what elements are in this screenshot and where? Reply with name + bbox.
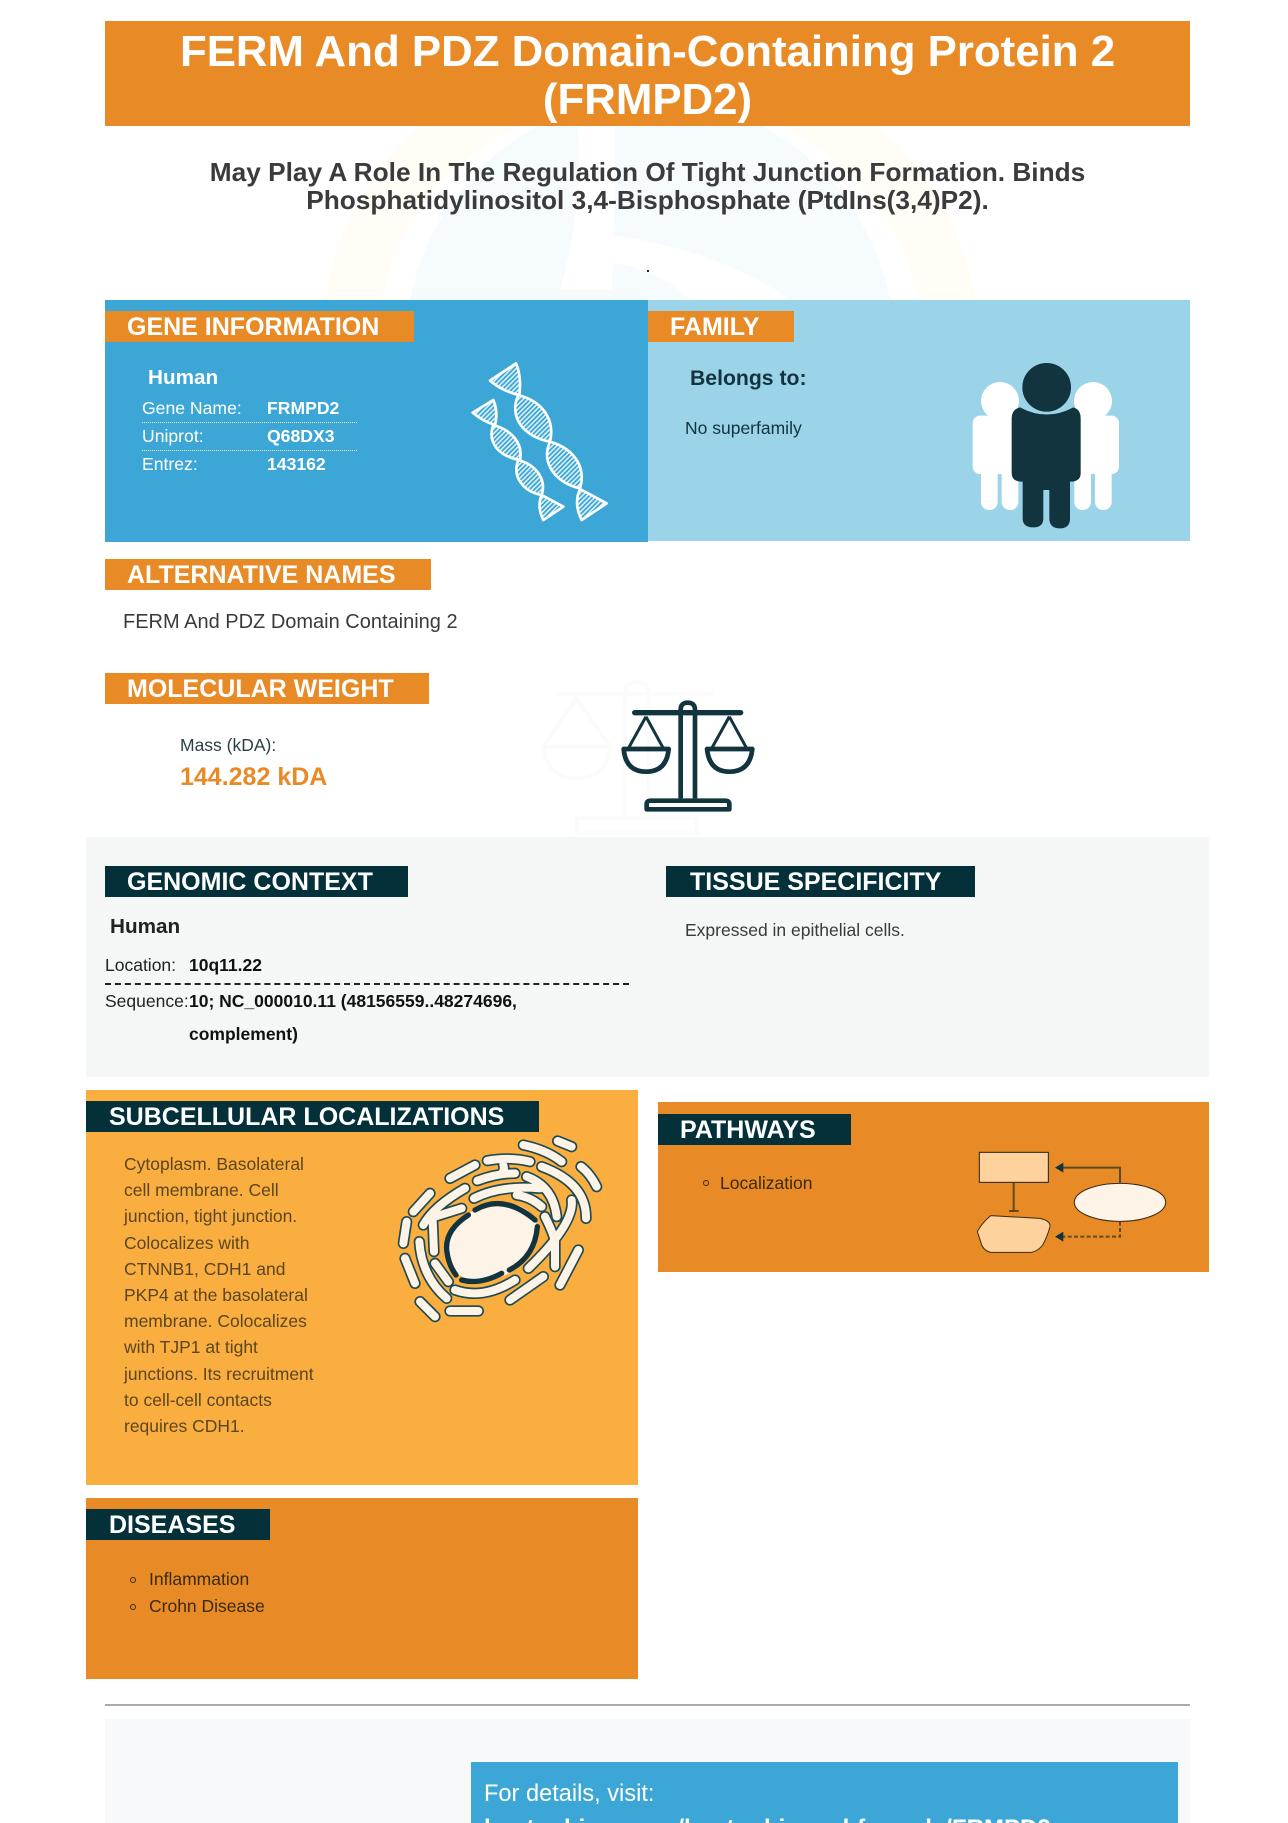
- localization text: cell membrane. Cell: [124, 1180, 279, 1200]
- disease item: Crohn Disease: [149, 1596, 265, 1616]
- sequence value: [189, 991, 517, 1044]
- family value: No superfamily: [685, 418, 802, 438]
- localization text: junction, tight junction.: [124, 1206, 297, 1226]
- title banner: (FRMPD2): [543, 75, 752, 124]
- title banner: [105, 21, 1190, 126]
- panel: footer: [105, 1719, 1190, 1823]
- heading: tissue specificity: TISSUE SPECIFICITY: [690, 868, 941, 896]
- title banner: FERM And PDZ Domain-Containing Protein 2: [180, 27, 1115, 76]
- background watermark: [325, 126, 975, 300]
- localization text: Colocalizes with: [124, 1233, 249, 1253]
- localization text: PKP4 at the basolateral: [124, 1285, 308, 1305]
- localization text: to cell-cell contacts: [124, 1390, 272, 1410]
- sequence label: Sequence:: [105, 991, 189, 1011]
- dashed divider: [105, 983, 629, 985]
- heading: diseases: DISEASES: [109, 1511, 235, 1539]
- icon: people group: [972, 363, 1119, 528]
- species label: Human: [148, 366, 218, 389]
- icon: pathway diagram: [976, 1152, 1166, 1253]
- localization text: junctions. Its recruitment: [124, 1364, 314, 1384]
- panel: subcellular localizations: [86, 1090, 638, 1485]
- subtitle: Phosphatidylinositol 3,4-Bisphosphate (PtdIns(3,4)P2).: [306, 185, 989, 215]
- localization text: with TJP1 at tight: [124, 1337, 258, 1357]
- gene name row: FRMPD2: [267, 398, 339, 418]
- callout text: For details, visit:: [484, 1781, 654, 1807]
- gene name row: Gene Name:: [142, 398, 242, 418]
- panel: genomic context and tissue specificity: [86, 837, 1209, 1077]
- heading: subcellular localizations: SUBCELLULAR LOCALIZATIONS: [109, 1103, 504, 1131]
- panel: family: [648, 300, 1190, 541]
- bullet marker: [130, 1577, 136, 1583]
- divider: [105, 1704, 1190, 1706]
- uniprot row: Q68DX3: [267, 426, 334, 446]
- icon: cell organelle: [398, 1135, 602, 1322]
- callout: details link: [471, 1762, 1178, 1823]
- entrez row: [142, 454, 326, 474]
- localization text: requires CDH1.: [124, 1416, 245, 1436]
- location value: 10q11.22: [189, 955, 262, 975]
- sequence value: 10; NC_000010.11 (48156559..48274696,: [189, 991, 517, 1011]
- entrez row: Entrez:: [142, 454, 198, 474]
- localization text: Cytoplasm. Basolateral: [124, 1154, 304, 1174]
- subtitle: May Play A Role In The Regulation Of Tight Junction Formation. Binds: [210, 157, 1085, 187]
- uniprot row: [142, 423, 357, 451]
- localization text: [124, 1154, 314, 1436]
- heading: genomic context: GENOMIC CONTEXT: [127, 868, 373, 896]
- alternative names text: FERM And PDZ Domain Containing 2: [123, 611, 458, 633]
- panel: pathways: [658, 1102, 1209, 1272]
- sequence value: complement): [189, 1024, 298, 1044]
- disease item: Inflammation: [149, 1569, 249, 1589]
- heading: molecular weight: MOLECULAR WEIGHT: [127, 675, 394, 703]
- dot: [647, 270, 649, 272]
- heading: pathways: PATHWAYS: [680, 1116, 816, 1144]
- icon: balance scale: [621, 700, 755, 812]
- heading: pathways: [658, 1114, 851, 1145]
- bullet marker: [130, 1604, 136, 1610]
- subtitle: [210, 157, 1085, 215]
- localization text: membrane. Colocalizes: [124, 1311, 307, 1331]
- mass value: 144.282 kDA: [180, 763, 327, 791]
- tissue text: Expressed in epithelial cells.: [685, 920, 905, 940]
- uniprot row: Uniprot:: [142, 426, 204, 446]
- location label: Location:: [105, 955, 176, 975]
- heading: family: [648, 311, 794, 342]
- icon: balance scale watermark: [520, 660, 780, 850]
- species label: Human: [110, 915, 180, 938]
- heading: diseases: [86, 1509, 270, 1540]
- bullet marker: [703, 1180, 709, 1186]
- entrez row: 143162: [267, 454, 326, 474]
- mass label: Mass (kDA):: [180, 735, 276, 755]
- heading: family: FAMILY: [670, 313, 759, 341]
- pathway item: Localization: [720, 1173, 812, 1193]
- heading: alternative names: ALTERNATIVE NAMES: [127, 561, 396, 589]
- icon: dna: [471, 362, 608, 522]
- localization text: CTNNB1, CDH1 and: [124, 1259, 285, 1279]
- gene name row: [142, 395, 357, 423]
- panel: diseases: [86, 1498, 638, 1679]
- heading: gene information: GENE INFORMATION: [127, 313, 379, 341]
- belongs to label: Belongs to:: [690, 367, 807, 390]
- panel: gene information: [105, 300, 648, 542]
